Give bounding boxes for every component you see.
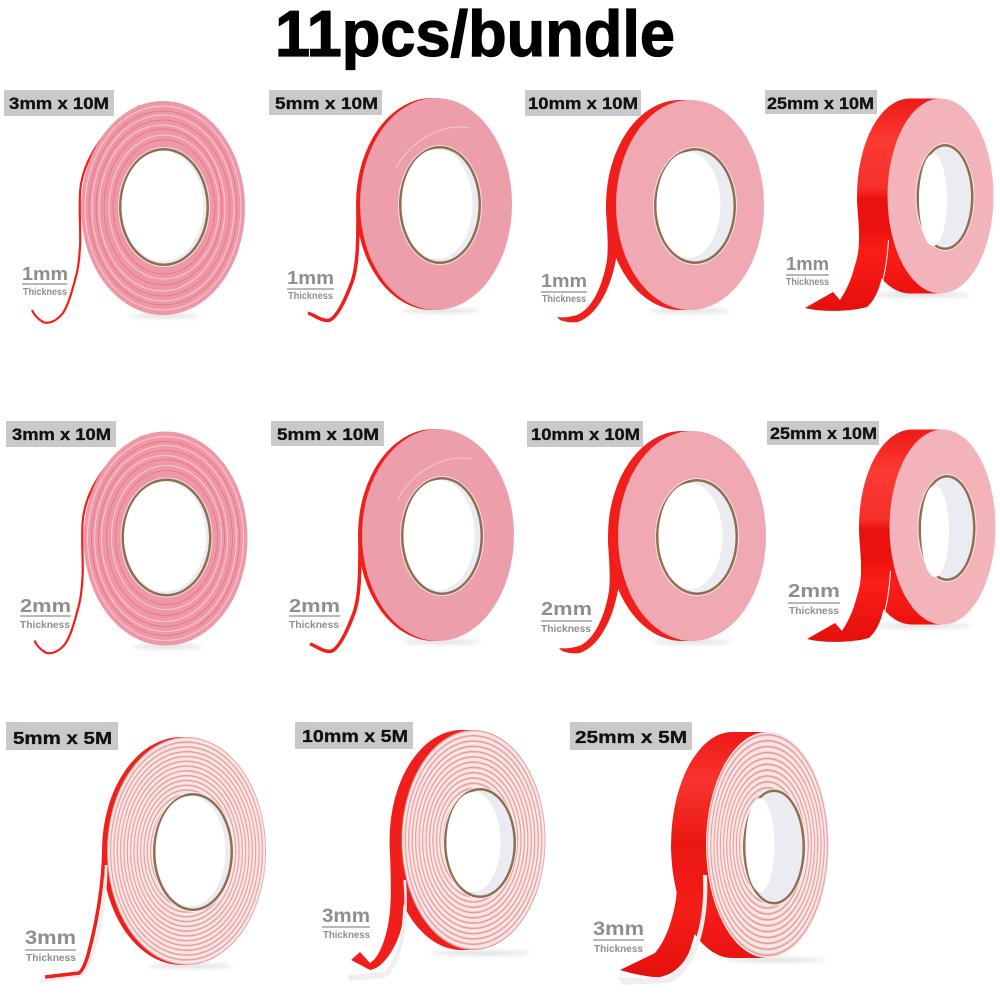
thickness label bbox=[289, 596, 340, 631]
size tag bbox=[6, 722, 118, 750]
size tag bbox=[765, 90, 877, 114]
size tag: 10mm x 10M bbox=[531, 426, 640, 444]
size tag: 5mm x 10M bbox=[275, 95, 378, 113]
size tag bbox=[570, 722, 692, 750]
thickness label: 1mm bbox=[22, 264, 68, 284]
thickness label bbox=[541, 271, 587, 305]
thickness label bbox=[322, 906, 370, 941]
tape roll bbox=[308, 98, 512, 320]
size tag bbox=[6, 421, 116, 447]
tape roll bbox=[805, 98, 994, 311]
size tag bbox=[527, 421, 643, 447]
size tag: 5mm x 5M bbox=[13, 728, 112, 748]
size tag bbox=[767, 421, 879, 445]
thickness label: 2mm bbox=[788, 581, 840, 601]
tape roll bbox=[557, 100, 764, 322]
thickness label: 3mm bbox=[25, 928, 76, 949]
tape roll bbox=[618, 732, 829, 985]
tape roll bbox=[32, 101, 245, 323]
tape roll bbox=[348, 730, 546, 981]
thickness label: Thickness bbox=[26, 953, 76, 964]
thickness label: Thickness bbox=[789, 606, 839, 617]
thickness label: 1mm bbox=[786, 254, 829, 274]
size tag bbox=[295, 722, 413, 749]
tape roll bbox=[559, 431, 766, 653]
panel: 10mm x 5M, 3mm thick bbox=[295, 722, 546, 981]
panel: 5mm x 5M, 3mm thick bbox=[6, 722, 266, 981]
thickness label: 2mm bbox=[289, 596, 340, 616]
size tag: 3mm x 10M bbox=[9, 95, 109, 113]
thickness label bbox=[20, 596, 71, 631]
panel: 3mm x 10M, 2mm thick bbox=[6, 421, 248, 653]
thickness label: 3mm bbox=[593, 919, 644, 940]
size tag: 25mm x 10M bbox=[770, 425, 877, 443]
panel: 10mm x 10M, 1mm thick bbox=[525, 90, 764, 322]
thickness label: 3mm bbox=[322, 906, 370, 927]
thickness label: Thickness bbox=[23, 287, 67, 298]
size tag: 25mm x 5M bbox=[575, 727, 687, 747]
panel: 5mm x 10M, 1mm thick bbox=[269, 90, 512, 320]
tape roll bbox=[34, 432, 248, 653]
thickness label: Thickness bbox=[288, 291, 333, 302]
thickness label: Thickness bbox=[542, 294, 586, 305]
thickness label: Thickness bbox=[289, 620, 339, 631]
thickness label: Thickness bbox=[541, 624, 591, 635]
thickness label bbox=[593, 919, 644, 955]
thickness label bbox=[287, 268, 334, 302]
size tag: 25mm x 10M bbox=[767, 95, 874, 113]
size tag bbox=[271, 421, 384, 446]
size tag bbox=[269, 90, 382, 115]
tape roll bbox=[310, 429, 514, 651]
size tag bbox=[525, 90, 641, 116]
thickness label bbox=[786, 254, 829, 288]
thickness label: Thickness bbox=[323, 930, 370, 941]
thickness label: 1mm bbox=[287, 268, 334, 288]
thickness label bbox=[541, 599, 592, 635]
thickness label bbox=[22, 264, 68, 298]
thickness label bbox=[788, 581, 840, 617]
panel: 3mm x 10M, 1mm thick bbox=[4, 90, 245, 323]
thickness label: Thickness bbox=[20, 620, 70, 631]
panel: 25mm x 5M, 3mm thick bbox=[570, 722, 829, 985]
size tag: 10mm x 10M bbox=[528, 95, 638, 113]
tape roll bbox=[807, 430, 996, 642]
thickness label: 1mm bbox=[541, 271, 587, 291]
thickness label bbox=[25, 928, 76, 964]
size tag: 5mm x 10M bbox=[277, 426, 379, 444]
panel: 5mm x 10M, 2mm thick bbox=[271, 421, 514, 651]
thickness label: Thickness bbox=[594, 944, 643, 955]
panel: 10mm x 10M, 2mm thick bbox=[527, 421, 766, 653]
size tag: 3mm x 10M bbox=[12, 426, 111, 444]
panel: 25mm x 10M, 2mm thick bbox=[767, 421, 996, 642]
tape roll bbox=[40, 737, 266, 981]
thickness label: Thickness bbox=[786, 277, 829, 288]
size tag bbox=[4, 90, 114, 116]
thickness label: 2mm bbox=[541, 599, 592, 619]
thickness label: 2mm bbox=[20, 596, 71, 616]
size tag: 10mm x 5M bbox=[302, 726, 408, 746]
panel: 25mm x 10M, 1mm thick bbox=[765, 90, 994, 311]
